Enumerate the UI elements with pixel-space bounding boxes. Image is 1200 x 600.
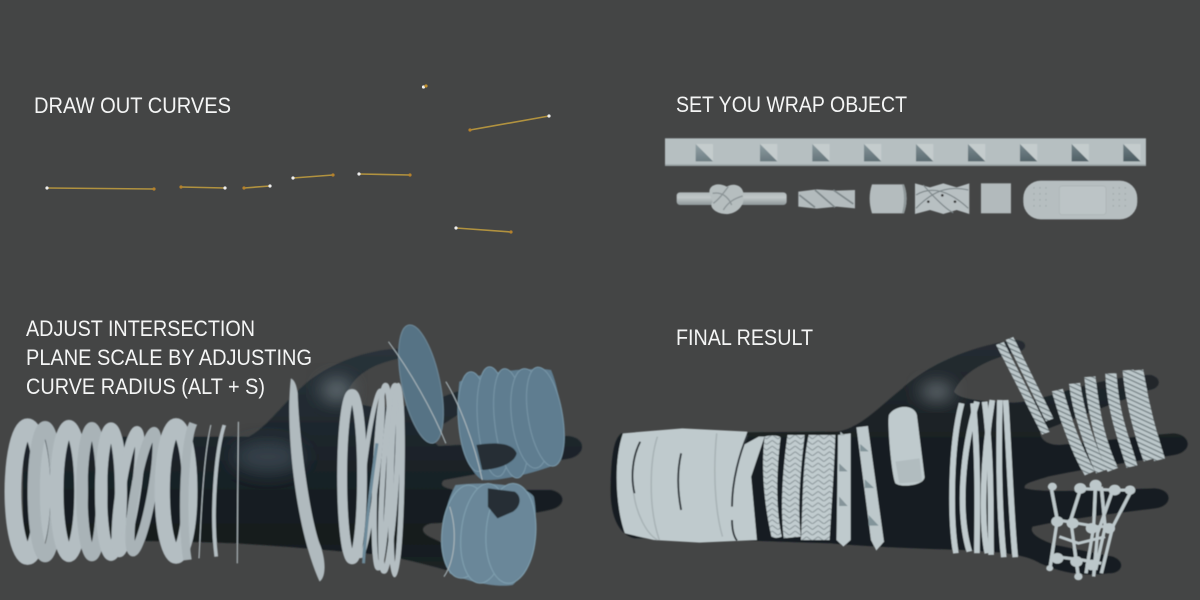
hand rings (342, 385, 404, 575)
heading: final result: FINAL RESULT (676, 325, 813, 350)
cylinder shade (902, 184, 907, 213)
wide wraps (617, 428, 765, 543)
curve 7 (468, 114, 551, 132)
heading: adjust intersection (26, 316, 312, 399)
curve 6 (422, 84, 428, 89)
blue planes on index and middle fingers (455, 365, 570, 480)
band-aid on hand (888, 407, 925, 486)
curve 5 (357, 172, 412, 177)
knot (677, 184, 787, 214)
rope strands (799, 190, 853, 207)
curve 1 (45, 186, 156, 191)
panel: curves (45, 84, 551, 234)
blue plane on thumb (390, 322, 452, 446)
heading: draw out curves: DRAW OUT CURVES (34, 93, 231, 118)
square segment (981, 183, 1011, 213)
large crescent plane (289, 378, 325, 582)
rope segment (798, 189, 855, 209)
rope on thumb (1000, 338, 1050, 433)
braided bands (763, 435, 835, 540)
heading: adjust intersection: PLANE SCALE BY ADJUSTING (26, 345, 312, 370)
hand silhouette (611, 340, 1188, 575)
thin planes over fingers (388, 342, 482, 577)
middle finger through planes (476, 443, 517, 470)
band-aid (1023, 181, 1137, 219)
heading: adjust intersection: ADJUST INTERSECTION (26, 316, 255, 341)
curve 8 (454, 226, 513, 234)
studded band 1 (837, 432, 851, 547)
panel: final hand (611, 338, 1188, 580)
thin hoops (952, 400, 1015, 557)
ring finger through planes (488, 488, 520, 518)
ropes on index finger (1057, 370, 1160, 473)
heading: set you wrap object: SET YOU WRAP OBJECT (676, 92, 907, 117)
curve 2 (179, 185, 227, 190)
studded strip (665, 138, 1146, 166)
panel: hand with intersection planes (13, 322, 582, 586)
panel: wrap objects (665, 138, 1146, 219)
blue planes on ring and pinky fingers (437, 482, 539, 586)
studded band 2 (856, 426, 884, 551)
heading: adjust intersection: CURVE RADIUS (ALT + S) (26, 374, 265, 399)
forearm rings (13, 422, 238, 563)
curve 3 (242, 184, 272, 190)
hand silhouette (23, 348, 582, 570)
curve 4 (291, 173, 335, 180)
braid segment (915, 183, 969, 214)
cylinder segment (870, 184, 907, 213)
knotted cord on ring and pinky fingers (1046, 480, 1135, 580)
